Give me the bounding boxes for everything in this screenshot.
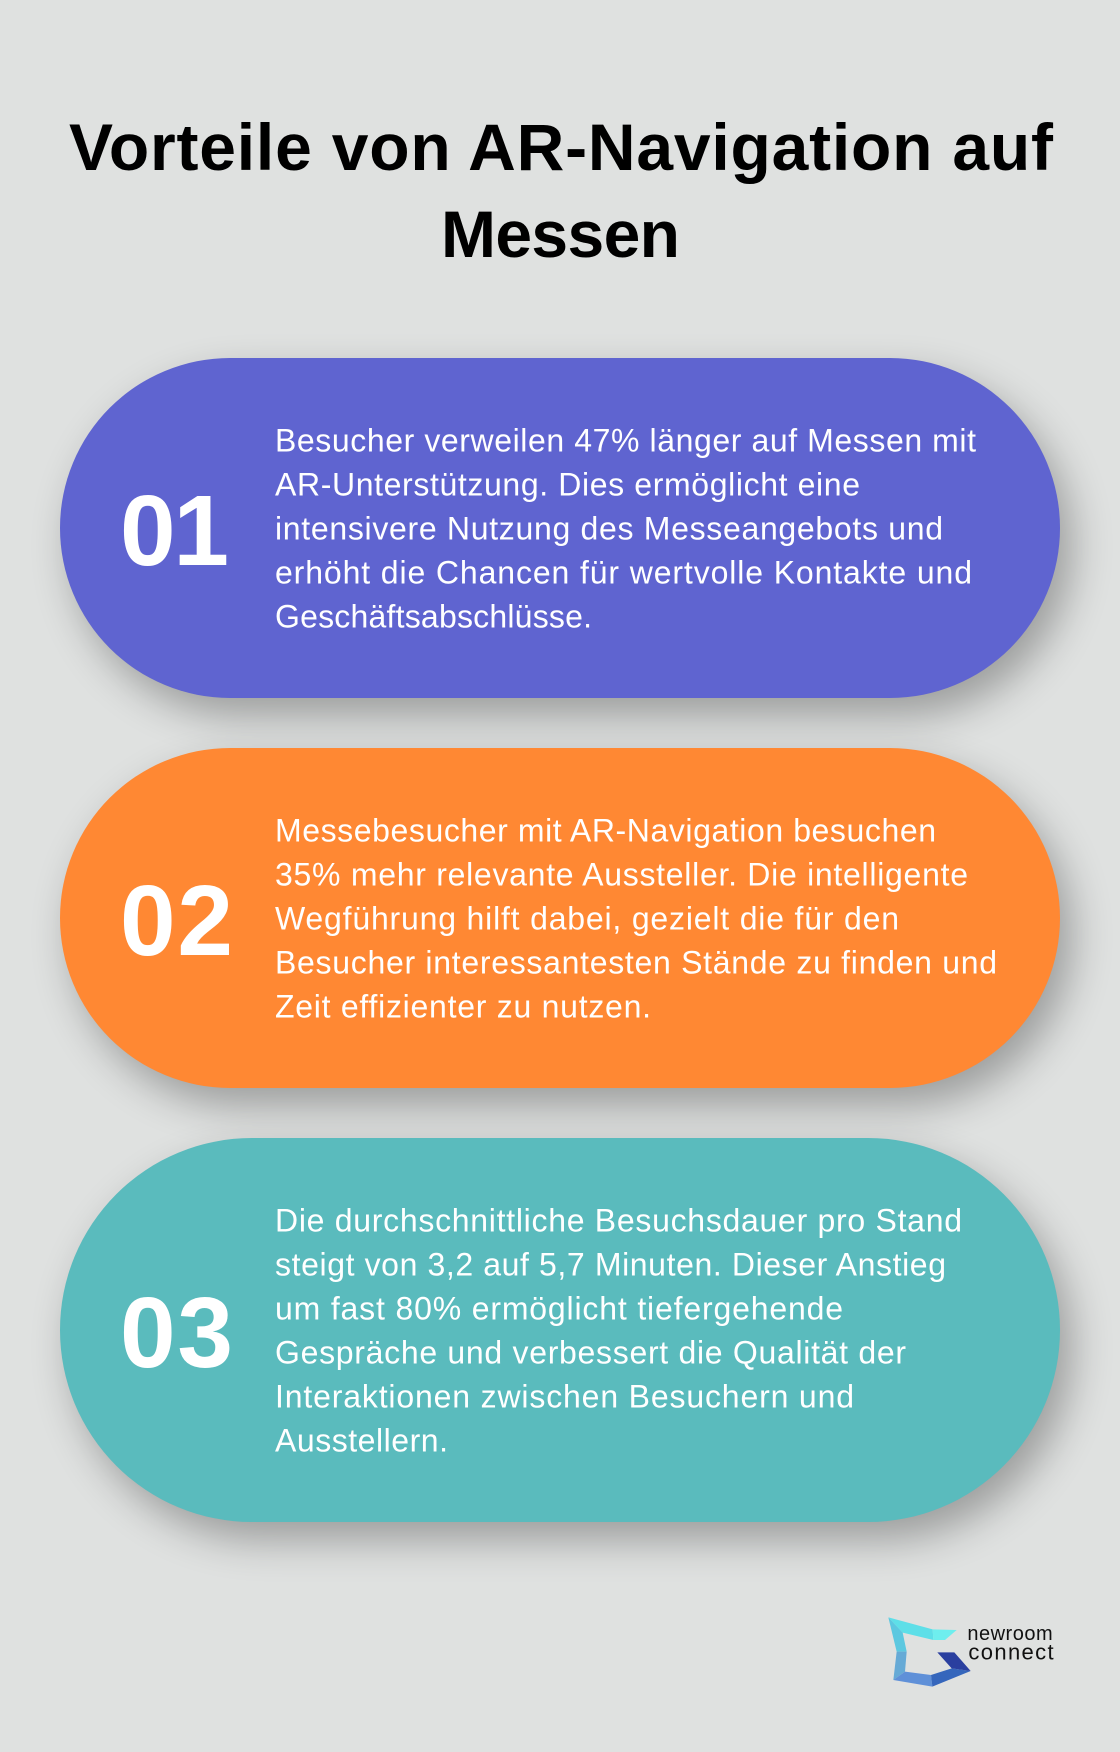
text block 02: Besucher interessantesten Stände zu finden und [275,944,997,980]
text block 03: Interaktionen zwischen Besuchern und [275,1378,854,1414]
title: Messen [441,197,680,271]
title [69,110,1054,271]
text block 02 [275,812,997,1024]
logo wordmark: newroom [967,1623,1053,1645]
number 03: 03 [120,1277,233,1389]
text block 03: um fast 80% ermöglicht tiefergehende [275,1290,843,1326]
text block 01: intensivere Nutzung des Messeangebots und [275,510,943,546]
text block 03: Gespräche und verbessert die Qualität der [275,1334,906,1370]
text block 03: Die durchschnittliche Besuchsdauer pro Stand [275,1202,962,1238]
text block 01 [275,422,976,634]
text block 01: AR-Unterstützung. Dies ermöglicht eine [275,466,860,502]
logo wordmark: connect [968,1640,1054,1665]
text block 02: Zeit effizienter zu nutzen. [275,988,651,1024]
text block 01: erhöht die Chancen für wertvolle Kontakte und [275,554,972,590]
panel: 02 Aussteller [60,748,1060,1088]
number 02: 02 [120,865,233,977]
logo: newroom connect [888,1617,1054,1687]
text block 02: Messebesucher mit AR-Navigation besuchen [275,812,936,848]
text block 01: Besucher verweilen 47% länger auf Messen mit [275,422,976,458]
title: Vorteile von AR-Navigation auf [69,110,1054,184]
text block 01: Geschäftsabschlüsse. [275,598,592,634]
number 01: 01 [120,475,229,587]
text block 03: steigt von 3,2 auf 5,7 Minuten. Dieser Anstieg [275,1246,946,1282]
panel: 01 Verweildauer [60,358,1060,698]
text block 03: Ausstellern. [275,1422,448,1458]
icon: logo mark [888,1617,971,1687]
logo wordmark [967,1623,1054,1665]
text block 02: Wegführung hilft dabei, gezielt die für den [275,900,899,936]
panel: 03 Besuchsdauer [60,1138,1060,1522]
text block 02: 35% mehr relevante Aussteller. Die intelligente [275,856,968,892]
text block 03 [275,1202,962,1458]
